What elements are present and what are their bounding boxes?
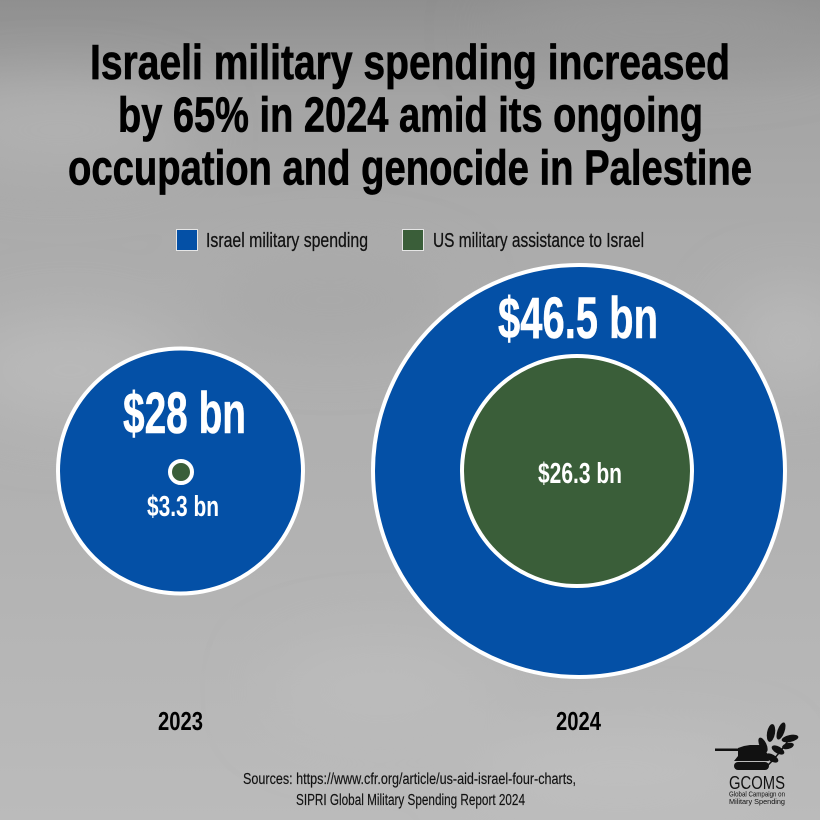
value: $46.5 bn: $46.5 bn — [498, 286, 658, 351]
icon: tank with olive branch — [715, 721, 799, 770]
sources: Sources: https://www.cfr.org/article/us-aid-israel-four-charts, — [243, 771, 576, 788]
sources — [243, 771, 576, 809]
sources: SIPRI Global Military Spending Report 2024 — [296, 792, 525, 809]
legend — [176, 230, 644, 252]
legend item: US military assistance to Israel — [402, 230, 644, 252]
logo: GCOMS — [715, 721, 799, 806]
legend item: Israel military spending: Israel military spending — [206, 230, 368, 252]
logo wordmark: GCOMS — [729, 773, 785, 793]
outer circle: Israel spending 2023 — [58, 348, 303, 594]
value: $28 bn: $28 bn — [123, 381, 246, 446]
title — [68, 36, 752, 196]
circle chart 2023 — [58, 348, 303, 594]
circle chart 2024 — [373, 265, 785, 677]
year label 2024: 2024 — [556, 706, 601, 736]
logo tagline: Global Campaign on — [729, 790, 785, 798]
logo tagline: Military Spending — [729, 797, 785, 806]
inner circle: US assistance 2023 — [170, 461, 192, 483]
legend item: Israel military spending — [176, 230, 368, 252]
inner circle: US assistance 2024 — [462, 356, 692, 586]
logo tagline — [729, 790, 785, 806]
value: $3.3 bn: $3.3 bn — [147, 491, 219, 523]
year label 2023: 2023 — [158, 706, 203, 736]
outer circle: Israel spending 2024 — [373, 265, 785, 677]
legend item: US military assistance to Israel: US military assistance to Israel — [433, 230, 644, 252]
value: $26.3 bn: $26.3 bn — [538, 458, 622, 490]
